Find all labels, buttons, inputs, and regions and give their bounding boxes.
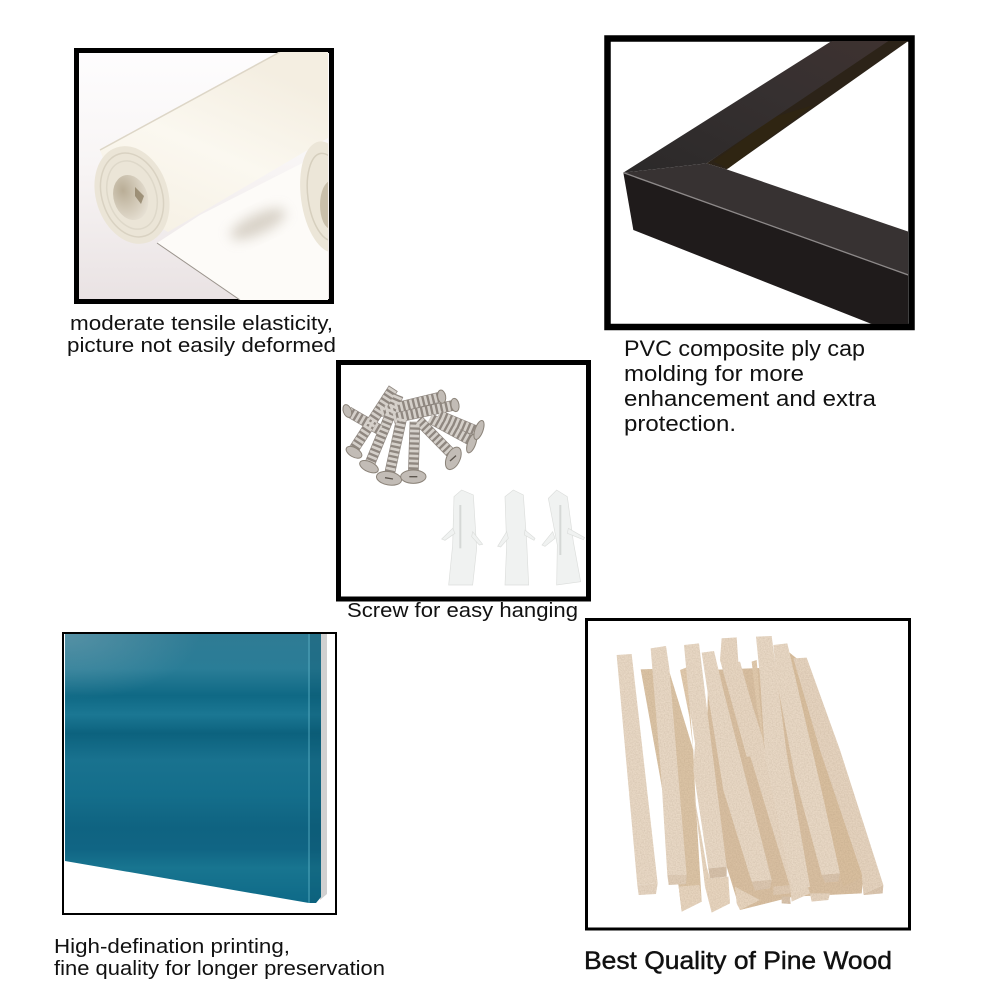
panel: teal printed canvas [63,633,336,914]
caption: frame corner: PVC composite ply cap [624,336,865,361]
image: frame moulding [623,41,908,324]
icon: screws [341,388,486,487]
caption: frame corner: protection. [624,411,736,436]
caption: screws: Screw for easy hanging [347,600,578,622]
panel: screws and wall plugs [338,362,588,599]
image: wood sticks [617,636,883,913]
caption: canvas roll: moderate tensile elasticity, [70,313,333,335]
panel: black frame corner [608,38,912,327]
panel: pine wood sticks [586,620,910,929]
icon: wall plugs [442,490,585,585]
caption: frame corner: molding for more [624,361,804,386]
caption: printing quality: High-defination printing, [54,936,290,958]
caption: pine wood: Best Quality of Pine Wood [584,947,892,975]
caption: canvas roll [67,313,336,357]
caption: canvas roll: picture not easily deformed [67,335,336,357]
panel: canvas roll [76,50,361,302]
caption: printing quality [54,936,385,980]
caption: frame corner: enhancement and extra [624,386,877,411]
caption: printing quality: fine quality for longer preservation [54,958,385,980]
caption: frame corner [624,336,877,436]
image: canvas edge [65,634,327,903]
image: rolled canvas [94,52,328,300]
